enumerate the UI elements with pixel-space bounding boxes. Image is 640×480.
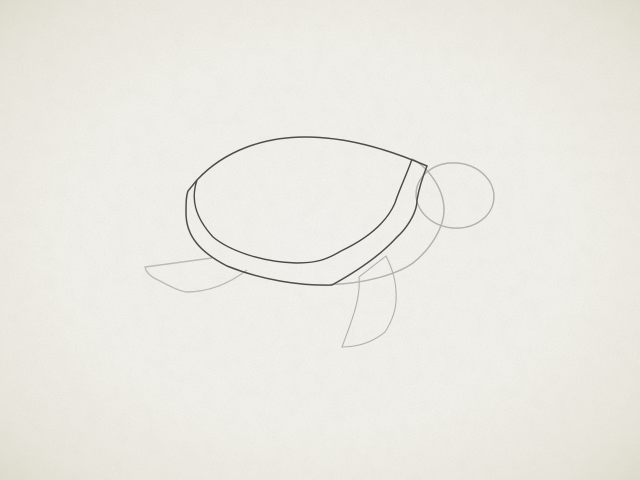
shell outer line: [186, 137, 427, 285]
rear flipper: [145, 258, 247, 292]
head outline: [413, 159, 497, 232]
front flipper: [342, 256, 396, 347]
body outline: [330, 159, 444, 284]
shell inner line: [194, 159, 412, 263]
